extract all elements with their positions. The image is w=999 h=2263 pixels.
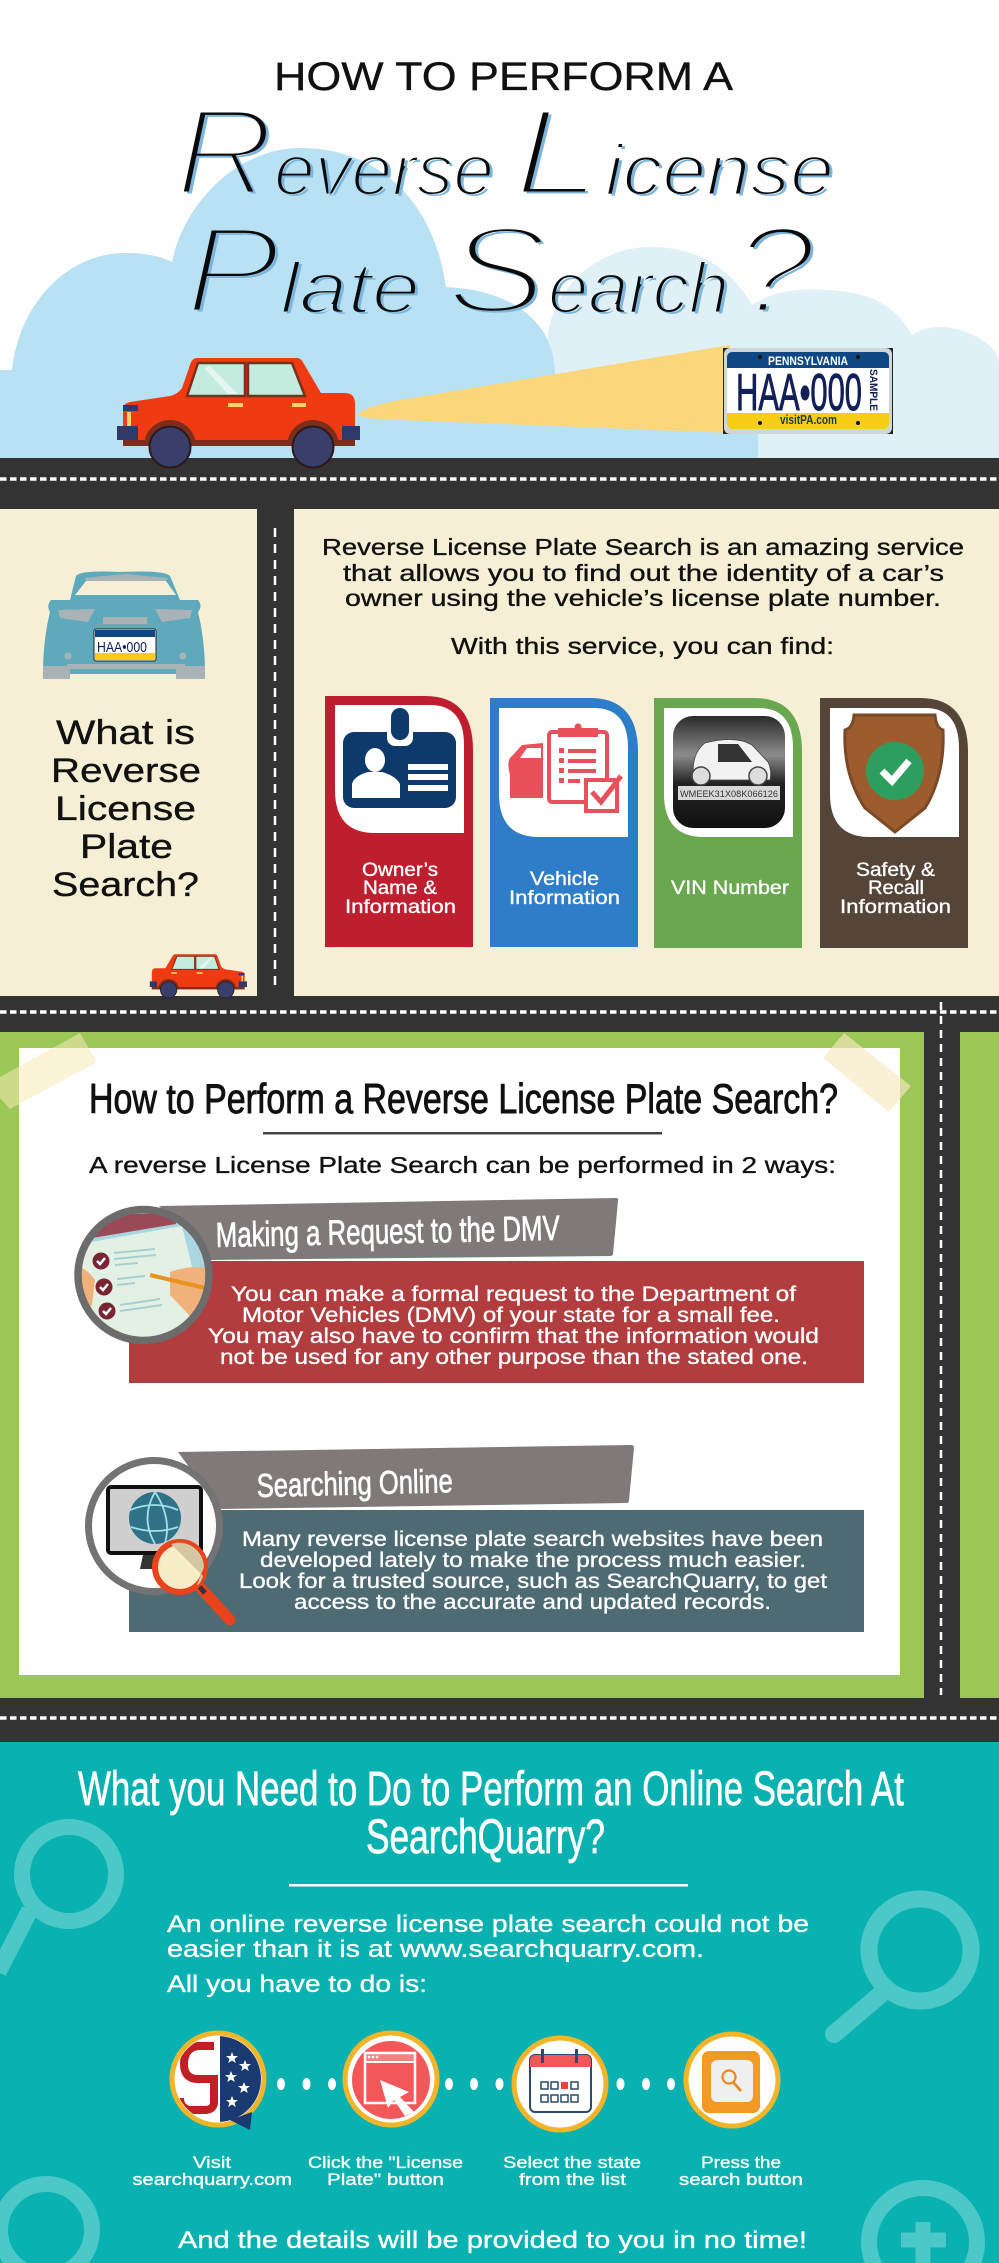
title script line 1: L — [513, 83, 602, 222]
card: VIN number — [654, 698, 802, 948]
heading: what is reverse license plate search: License — [55, 790, 196, 828]
intro text — [322, 534, 964, 659]
heading: online search — [78, 1763, 904, 1864]
divider rule — [263, 1132, 662, 1134]
card: safety and recall — [820, 698, 968, 948]
step 3 icon: calendar — [514, 2038, 606, 2130]
dots connector 2 — [445, 2078, 504, 2090]
title kicker: HOW TO PERFORM A — [274, 55, 733, 99]
body text: Look for a trusted source, such as SearchQuarry, to get — [239, 1569, 827, 1593]
card: owner's name: Name & — [363, 878, 437, 899]
icon: vehicle checklist — [508, 724, 621, 811]
license plate — [723, 348, 893, 434]
way 1: DMV request — [70, 1198, 864, 1383]
subheading: two ways: A reverse License Plate Search can be performed in 2 ways: — [89, 1152, 836, 1178]
step labels: searchquarry.com — [132, 2170, 292, 2189]
intro text — [167, 1911, 809, 1998]
main cloud — [0, 148, 758, 458]
heading: what is reverse license plate search: What is — [56, 714, 195, 752]
title script line 1: icense — [605, 131, 834, 211]
title script line 2: P — [185, 201, 280, 340]
heading: what is reverse license plate search: Plate — [80, 828, 173, 866]
license plate: PENNSYLVANIA — [768, 354, 848, 368]
heading: what is reverse license plate search: Reverse — [51, 752, 201, 790]
decorative magnifier left — [0, 1827, 116, 1972]
banner — [178, 1445, 634, 1509]
card: VIN number: VIN Number — [671, 878, 790, 899]
panel: header sky background — [0, 0, 999, 460]
panel: what is — [0, 509, 257, 996]
card: owner's name: Owner’s — [362, 860, 438, 881]
intro text: that allows you to find out the identity of a car’s — [343, 560, 944, 586]
icon: VIN app: WMEEK31X08K066126 — [680, 789, 778, 799]
panel: service description — [294, 509, 999, 996]
road: second horizontal — [0, 996, 999, 1032]
body text: developed lately to make the process much easier. — [260, 1548, 806, 1572]
way 2: searching online — [88, 1445, 864, 1632]
body text — [239, 1527, 827, 1614]
decorative magnifier bottom right — [869, 2188, 977, 2263]
icon: ID badge — [343, 708, 456, 808]
icon: checklist and hand — [70, 1210, 210, 1350]
heading: how to perform: How to Perform a Reverse License Plate Search? — [89, 1075, 838, 1122]
icon: blue car front view — [43, 572, 205, 679]
road: vertical upper — [257, 500, 294, 997]
road: top — [0, 458, 999, 509]
heading: what is reverse license plate search: Search? — [52, 866, 199, 904]
intro text: easier than it is at www.searchquarry.com. — [167, 1936, 704, 1963]
license plate: visitPA.com — [780, 412, 837, 427]
decorative magnifier bottom left — [0, 2184, 92, 2263]
title script line 2: late — [280, 249, 420, 329]
slate text box — [129, 1510, 864, 1632]
body text: Motor Vehicles (DMV) of your state for a small fee. — [242, 1303, 780, 1327]
body text: not be used for any other purpose than the stated one. — [220, 1345, 808, 1369]
decorative magnifier right — [834, 1899, 971, 2034]
card: safety and recall: Recall — [868, 878, 924, 899]
icon: blue car front view: HAA•000 — [97, 639, 147, 656]
title script line 1: everse — [274, 131, 494, 211]
step labels: Click the "License — [308, 2153, 463, 2172]
step labels: from the list — [519, 2170, 626, 2189]
panel: online search — [0, 1742, 999, 2263]
panel: how to perform — [0, 1032, 999, 1698]
dots connector 1 — [277, 2078, 336, 2090]
tape right — [823, 1033, 911, 1112]
headlight beam — [357, 345, 730, 433]
road: third horizontal — [0, 1698, 999, 1742]
body text: Many reverse license plate search websites have been — [242, 1527, 823, 1551]
white sheet — [19, 1048, 900, 1675]
body text: You can make a formal request to the Department of — [231, 1282, 796, 1306]
pale cloud — [548, 247, 999, 458]
intro text: An online reverse license plate search could not be — [167, 1911, 809, 1938]
title script line 2: ? — [733, 201, 816, 340]
card: owner's name — [325, 696, 473, 947]
step 1 icon: SearchQuarry logo — [172, 2033, 264, 2130]
red text box — [129, 1261, 864, 1383]
step labels: Plate" button — [327, 2170, 444, 2189]
license plate: SAMPLE — [867, 369, 879, 411]
banner title: Searching Online — [256, 1462, 453, 1504]
intro text: All you have to do is: — [167, 1971, 427, 1998]
road: vertical lower — [924, 1002, 960, 1705]
card: vehicle information — [490, 698, 638, 947]
body text: You may also have to confirm that the information would — [208, 1324, 819, 1348]
heading: what is reverse license plate search — [51, 714, 201, 904]
card: vehicle information: Information — [509, 888, 620, 909]
step labels: Press the — [701, 2153, 781, 2172]
icon: monitor and magnifier — [88, 1460, 230, 1620]
closing line: And the details will be provided to you in no time! — [178, 2227, 807, 2254]
body text — [208, 1282, 819, 1369]
step 4 icon: search button — [686, 2034, 778, 2126]
banner — [159, 1198, 618, 1260]
step labels: search button — [679, 2170, 803, 2189]
card: vehicle information: Vehicle — [530, 869, 599, 890]
red car — [117, 358, 360, 468]
card: owner's name: Information — [345, 897, 456, 918]
small red car — [150, 954, 247, 998]
step labels: Select the state — [503, 2153, 641, 2172]
step labels: Visit — [193, 2153, 231, 2172]
divider rule — [289, 1884, 688, 1886]
license plate: HAA•000 — [736, 364, 862, 422]
title script line 2: S — [446, 201, 548, 340]
title script line 2: earch — [548, 249, 729, 329]
card: safety and recall: Information — [840, 897, 951, 918]
banner title: Making a Request to the DMV — [215, 1209, 561, 1255]
icon: shield check — [845, 715, 943, 832]
step 2 icon: browser cursor — [345, 2033, 437, 2125]
intro text: With this service, you can find: — [451, 633, 834, 659]
body text: access to the accurate and updated records. — [294, 1590, 771, 1614]
title script line 1: R — [175, 83, 274, 222]
intro text: Reverse License Plate Search is an amazing service — [322, 534, 964, 560]
dots connector 3 — [616, 2078, 675, 2090]
heading: online search: SearchQuarry? — [366, 1811, 605, 1864]
step labels — [132, 2153, 803, 2189]
intro text: owner using the vehicle’s license plate number. — [345, 585, 941, 611]
tape left — [0, 1033, 97, 1109]
icon: VIN app — [673, 716, 785, 828]
card: safety and recall: Safety & — [856, 860, 935, 881]
